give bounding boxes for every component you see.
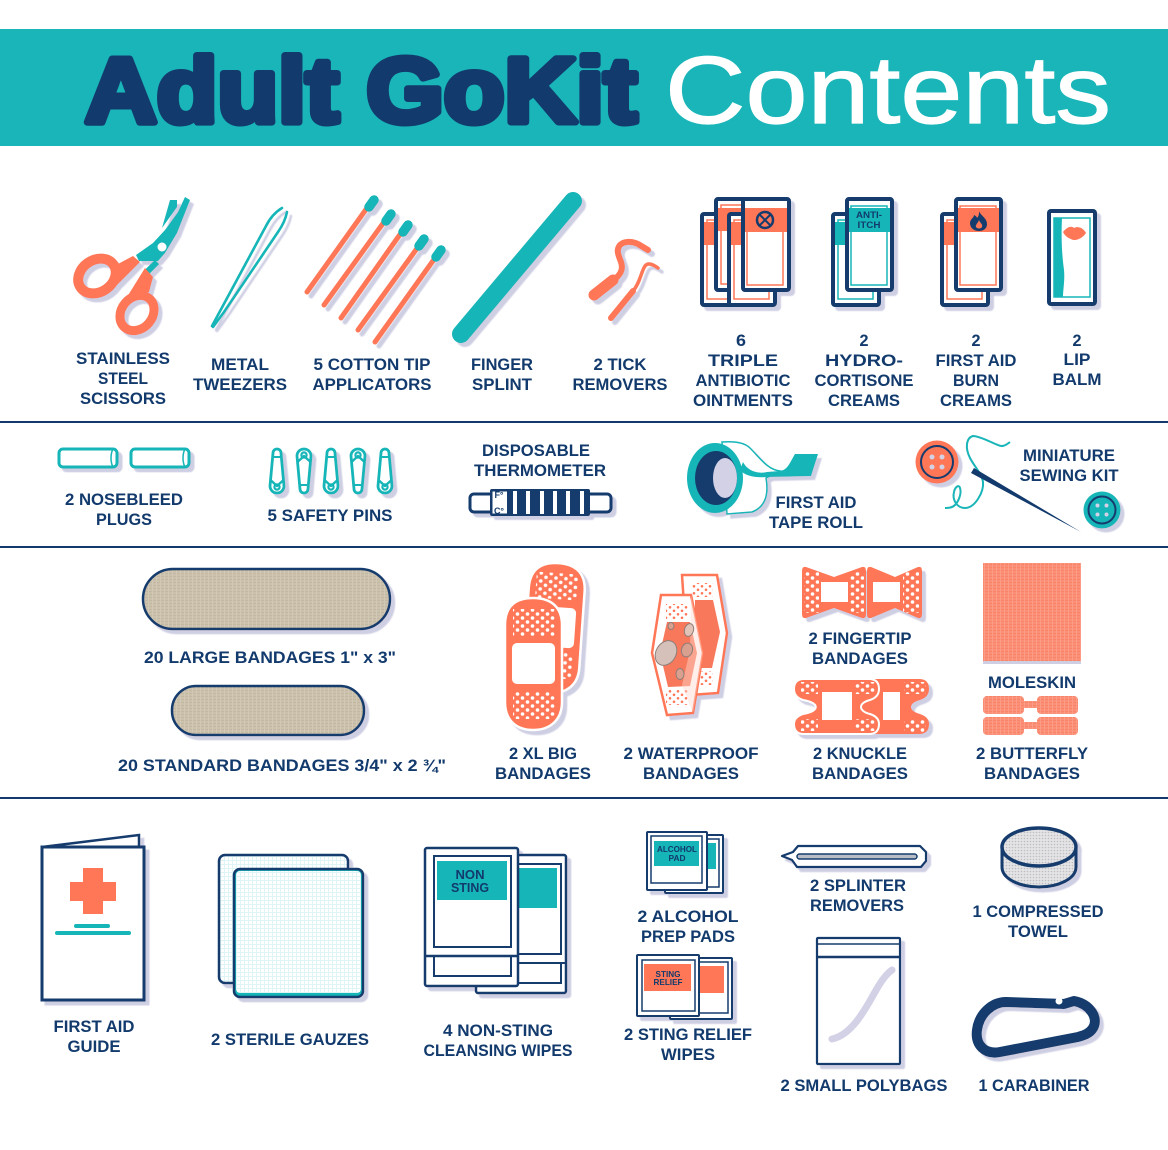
icon: polybag	[817, 938, 900, 1064]
icon: sting relief packets	[637, 955, 732, 1019]
label: CLEANSING WIPES	[424, 1041, 572, 1060]
icon: hydrocortisone packets	[833, 199, 892, 305]
icon: moleskin sheet	[983, 563, 1081, 664]
label: BURN	[953, 371, 999, 390]
label	[976, 744, 1089, 783]
title: Adult GoKit	[85, 40, 637, 142]
item: burn creams	[936, 199, 1016, 410]
label: REMOVERS	[810, 896, 904, 915]
label: 2	[972, 331, 980, 350]
packet text: NON	[456, 867, 484, 882]
item: hydrocortisone creams	[814, 199, 914, 410]
item: knuckle bandages	[794, 679, 929, 783]
label	[471, 355, 533, 394]
icon: standard bandage	[172, 686, 364, 735]
packet text: ITCH	[858, 220, 881, 231]
label: OINTMENTS	[693, 391, 793, 410]
item: moleskin	[983, 563, 1081, 692]
label: 2 ALCOHOL	[638, 907, 738, 926]
label: 4 NON-STING	[443, 1021, 553, 1040]
label: MOLESKIN	[988, 673, 1076, 692]
icon: thermometer: C°	[494, 506, 504, 516]
icon: splint	[461, 201, 573, 334]
item: butterfly bandages	[976, 696, 1089, 783]
icon: carabiner	[977, 998, 1095, 1053]
label: 20 STANDARD BANDAGES 3/4" x 2 ¾"	[118, 756, 446, 775]
label	[972, 902, 1104, 941]
label: 2 XL BIG	[509, 744, 577, 763]
label: REMOVERS	[572, 375, 668, 394]
label	[808, 629, 912, 668]
item: nosebleed plugs	[59, 449, 189, 529]
item: standard bandages	[118, 686, 446, 775]
item: sting relief wipes	[624, 955, 752, 1064]
item: triple antibiotic ointments	[693, 199, 793, 410]
item: scissors	[71, 197, 190, 408]
label: METAL	[211, 355, 269, 374]
label	[1052, 331, 1102, 389]
label: 1 COMPRESSED	[972, 902, 1104, 921]
item: fingertip bandages	[802, 567, 922, 668]
label: TOWEL	[1008, 922, 1068, 941]
label: STEEL	[98, 369, 148, 388]
label: 2 SPLINTER	[810, 876, 906, 895]
label	[936, 331, 1016, 410]
label: 1 CARABINER	[978, 1076, 1090, 1095]
icon: burn cream packets	[942, 199, 1001, 305]
label: SEWING KIT	[1020, 466, 1119, 485]
label: GUIDE	[68, 1037, 120, 1056]
label	[312, 355, 432, 394]
icon: towel cylinder	[1002, 828, 1076, 887]
label: BANDAGES	[643, 764, 739, 783]
label: CREAMS	[940, 391, 1012, 410]
item: thermometer	[470, 441, 611, 516]
label: 2 WATERPROOF	[624, 744, 758, 763]
label: 2 STERILE GAUZES	[211, 1030, 369, 1049]
packet text: ALCOHOL	[657, 845, 697, 854]
icon: butterfly bandages	[983, 696, 1078, 735]
label: BANDAGES	[984, 764, 1080, 783]
label: BANDAGES	[495, 764, 591, 783]
icon: plugs	[59, 449, 189, 467]
label: 2	[1072, 331, 1082, 350]
label	[193, 355, 287, 394]
label: SPLINT	[472, 375, 533, 394]
label: TWEEZERS	[193, 375, 287, 394]
label	[769, 493, 863, 532]
label: PREP PADS	[641, 927, 735, 946]
label: BALM	[1052, 370, 1102, 389]
label	[474, 441, 606, 480]
packet text: ANTI-	[856, 210, 882, 221]
item: first aid guide	[42, 835, 144, 1056]
label: 2 TICK	[594, 355, 647, 374]
label	[65, 490, 183, 529]
label	[572, 355, 668, 394]
icon: alcohol packets	[647, 832, 723, 893]
icon: large bandage	[143, 569, 390, 629]
icon: tick removers	[594, 242, 658, 318]
label: WIPES	[661, 1045, 715, 1064]
icon: lip balm packet	[1049, 211, 1095, 304]
label: BANDAGES	[812, 764, 908, 783]
label	[495, 744, 591, 783]
header banner	[0, 29, 1168, 146]
label	[693, 331, 793, 410]
label: BANDAGES	[812, 649, 908, 668]
label: DISPOSABLE	[482, 441, 590, 460]
item: XL big bandages	[495, 561, 591, 783]
label	[1020, 446, 1119, 485]
label: SCISSORS	[80, 389, 166, 408]
icon: coral button	[916, 440, 958, 484]
label: PLUGS	[96, 510, 152, 529]
item: compressed towel	[972, 828, 1104, 941]
item: finger splint	[461, 201, 573, 394]
icon: splinter remover	[782, 846, 926, 867]
icon: ointment packets	[702, 199, 789, 305]
label: 20 LARGE BANDAGES 1" x 3"	[144, 648, 396, 667]
label: FIRST AID	[776, 493, 856, 512]
item: sterile gauzes	[211, 855, 369, 1049]
label: 2 BUTTERFLY	[976, 744, 1089, 763]
icon: XL bandages	[505, 561, 586, 730]
label: FINGER	[471, 355, 533, 374]
title accent: Contents	[665, 37, 1111, 144]
icon: waterproof bandages	[651, 575, 727, 715]
packet text: PAD	[668, 854, 686, 863]
icon: thermometer: F°	[494, 490, 504, 500]
label: THERMOMETER	[474, 461, 606, 480]
label: 5 SAFETY PINS	[268, 506, 392, 525]
packet text: STING	[656, 969, 681, 979]
icon: non-sting packets	[425, 848, 566, 993]
label: APPLICATORS	[312, 375, 432, 394]
packet text: STING	[451, 880, 489, 895]
item: non-sting wipes	[424, 848, 572, 1060]
icon: thermometer	[470, 489, 611, 516]
label: STAINLESS	[76, 349, 170, 368]
label: TRIPLE	[708, 351, 778, 370]
label: 2 NOSEBLEED	[65, 490, 183, 509]
label: 2 STING RELIEF	[624, 1025, 752, 1044]
label	[810, 876, 906, 915]
icon: gauze pads	[219, 855, 363, 997]
label: ANTIBIOTIC	[696, 371, 790, 390]
packet text	[451, 867, 489, 895]
label: CORTISONE	[814, 371, 914, 390]
label: 5 COTTON TIP	[314, 355, 430, 374]
packet text	[657, 845, 697, 863]
label	[638, 907, 738, 946]
label: 2	[860, 331, 868, 350]
label	[54, 1017, 134, 1056]
item: safety pins	[268, 449, 392, 525]
item: tape roll	[687, 442, 863, 532]
item: small polybags	[780, 938, 948, 1095]
label: 2 FINGERTIP	[808, 629, 912, 648]
label: 6	[736, 331, 746, 350]
icon: fingertip bandages	[802, 567, 922, 618]
item: carabiner	[977, 998, 1095, 1095]
icon: thread	[945, 436, 1010, 508]
label	[76, 349, 170, 408]
icon: needle	[971, 468, 1081, 532]
packet text	[856, 210, 882, 231]
label: TAPE ROLL	[769, 513, 863, 532]
packet text	[654, 969, 682, 987]
icon: knuckle bandages	[794, 679, 929, 734]
label: 2 SMALL POLYBAGS	[780, 1076, 948, 1095]
label: 2 KNUCKLE	[813, 744, 907, 763]
packet text: RELIEF	[654, 977, 682, 987]
icon: teal button	[1084, 492, 1120, 528]
label: CREAMS	[828, 391, 900, 410]
item: alcohol prep pads	[638, 832, 738, 946]
item: lip balm	[1049, 211, 1102, 389]
item: large bandages	[143, 569, 396, 667]
icon: cotton swabs	[307, 200, 441, 342]
icon: tweezers	[212, 208, 287, 327]
label	[624, 1025, 752, 1064]
label	[624, 744, 758, 783]
item: splinter removers	[782, 846, 926, 915]
icon: scissors	[71, 197, 190, 338]
label: LIP	[1064, 350, 1090, 369]
label: FIRST AID	[936, 351, 1016, 370]
label	[814, 331, 914, 410]
icon: pins	[270, 449, 392, 493]
label: HYDRO-	[825, 351, 903, 370]
item: tweezers	[193, 208, 287, 394]
item: cotton tip applicators	[307, 200, 441, 394]
icon: guide booklet	[42, 835, 144, 1000]
item: sewing kit	[916, 436, 1120, 532]
icon: tape roll	[687, 442, 818, 514]
item: waterproof bandages	[624, 575, 758, 783]
label	[812, 744, 908, 783]
label: FIRST AID	[54, 1017, 134, 1036]
item: tick removers	[572, 242, 668, 394]
label: MINIATURE	[1023, 446, 1115, 465]
label	[424, 1021, 572, 1060]
